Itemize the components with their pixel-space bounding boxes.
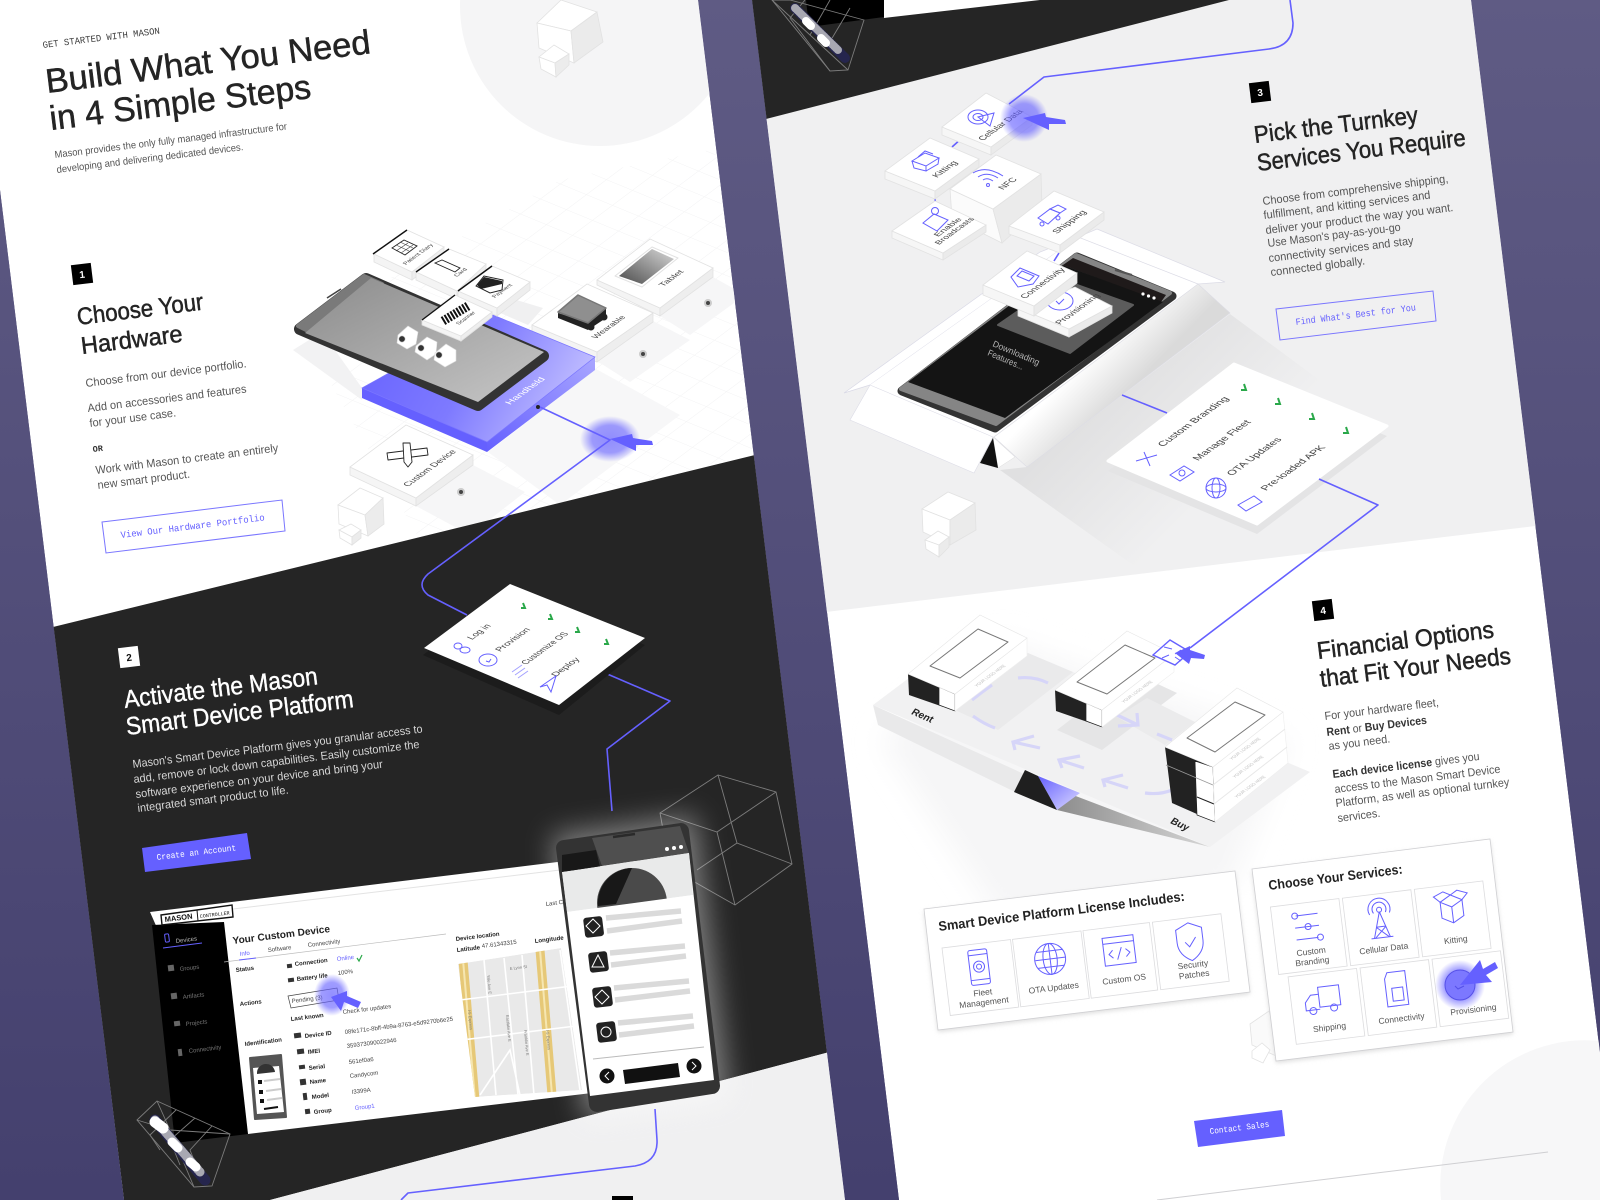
sidebar menu: Groups xyxy=(180,965,200,973)
wireframe screws xyxy=(137,1101,230,1187)
step 2 badge xyxy=(118,646,140,668)
step 4 text: Each device license gives you xyxy=(1332,751,1480,781)
phone in box xyxy=(901,255,1172,428)
step 4 text: services. xyxy=(1337,808,1381,825)
sidebar menu xyxy=(163,934,222,1056)
cell: cellular data: Cellular Data xyxy=(1359,940,1409,956)
step 3 badge peek xyxy=(612,1196,633,1200)
tile: shipping xyxy=(1009,191,1104,253)
fulcrum xyxy=(1014,770,1080,810)
step 2 text: integrated smart product to life. xyxy=(137,785,289,815)
cell: custom OS: Custom OS xyxy=(1102,971,1147,987)
dashboard content: Online xyxy=(337,955,355,963)
step 2 text xyxy=(132,723,423,815)
checklist card: log in: Customize OS xyxy=(519,631,571,666)
card: license includes: Smart Device Platform License Includes: xyxy=(938,889,1186,934)
tile: NFC xyxy=(950,155,1042,243)
dashboard content: Serial xyxy=(309,1064,326,1072)
sidebar menu: Devices xyxy=(176,936,197,945)
logo xyxy=(161,905,233,925)
box: rent 1: YOUR LOGO HERE xyxy=(973,664,1008,688)
dashboard content: I3399A xyxy=(352,1088,371,1096)
step 1 heading xyxy=(78,296,203,354)
section: light footer xyxy=(270,1044,860,1200)
tile: patient diary: Patient Diary xyxy=(402,243,435,266)
checklist card: services xyxy=(1108,364,1387,534)
step 2 text: add, remove or lock down capabilities. Easily customize the xyxy=(133,739,420,786)
decorative circle top xyxy=(460,0,710,146)
connector line: step 1 to 2 xyxy=(422,407,670,811)
tile: tablet xyxy=(597,239,713,316)
tile: kitting: Kitting xyxy=(930,160,960,179)
decorative textured area xyxy=(880,640,1290,920)
dashboard content: Actions xyxy=(240,999,263,1008)
phone in box: Features... xyxy=(986,348,1025,372)
step 3 text xyxy=(1262,173,1454,279)
dashboard content: Connection xyxy=(295,958,328,968)
section: step 3 background xyxy=(752,0,1550,620)
step 2 text: software experience on your device and bring your xyxy=(135,759,384,801)
cell: custom branding: Branding xyxy=(1295,954,1330,968)
platform: handheld: Handheld xyxy=(503,376,547,406)
phone in box: Downloading xyxy=(991,339,1041,367)
tile: provisioning xyxy=(1018,287,1112,337)
cell: OTA updates xyxy=(1012,931,1089,1007)
step 2 heading: Activate the Mason xyxy=(122,662,319,714)
list rows xyxy=(583,911,694,1043)
tile: custom device: Custom Device xyxy=(401,448,458,488)
icon: cube behind services card xyxy=(1250,1011,1285,1063)
tile: connectivity xyxy=(983,251,1077,316)
cell: kitting xyxy=(1414,881,1491,957)
cell: connectivity: Connectivity xyxy=(1378,1010,1426,1026)
tile: payment xyxy=(458,266,530,316)
step 4 text xyxy=(1324,697,1510,825)
connector line: box to checklist xyxy=(1122,395,1167,413)
logo: CONTROLLER xyxy=(200,910,230,920)
tile: custom device xyxy=(350,425,473,506)
step 2 heading: Smart Device Platform xyxy=(124,685,355,741)
step 3 text: fulfillment, and kitting services and xyxy=(1263,190,1431,222)
tile: payment: Payment xyxy=(491,283,515,299)
step 4 text: as you need. xyxy=(1328,734,1391,753)
map: E Lynn St xyxy=(510,964,528,971)
step 3 text: connected globally. xyxy=(1270,255,1366,279)
step 3 heading: Services You Require xyxy=(1255,125,1467,177)
sidebar menu: Connectivity xyxy=(189,1045,222,1055)
tile: kitting xyxy=(885,138,979,199)
dashboard content: 100% xyxy=(338,969,354,977)
phone nav xyxy=(600,1058,702,1084)
panel: right page xyxy=(752,0,1600,1200)
step 1 heading: Hardware xyxy=(79,321,184,360)
dashboard content: 08fe171c-8bff-4b9a-8763-e5d9270b6e25 xyxy=(345,1017,454,1036)
panel: left page xyxy=(0,0,860,1200)
front wall xyxy=(850,385,993,473)
sidebar menu: Projects xyxy=(186,1019,208,1028)
step 1 badge: 1 xyxy=(79,270,86,281)
box floor shadow xyxy=(1000,314,1360,570)
dashboard content: Connectivity xyxy=(308,939,341,949)
step 4 text: Rent or Buy Devices xyxy=(1326,715,1428,739)
step 3 badge xyxy=(1249,81,1271,103)
button: find what's best: Find What's Best for You xyxy=(1295,302,1416,328)
tile: cellular data xyxy=(942,93,1032,155)
box stack: buy: YOUR LOGO HERE xyxy=(1233,775,1268,799)
wireframe cube xyxy=(660,775,792,905)
button: contact sales: Contact Sales xyxy=(1209,1120,1270,1137)
card: choose your services xyxy=(1252,839,1513,1063)
dashboard content: Check for updates xyxy=(343,1004,392,1016)
eyebrow: GET STARTED WITH MASON xyxy=(42,26,160,51)
step 1 text xyxy=(85,358,279,492)
cursor: provisioning xyxy=(1435,960,1498,1010)
map: Yale Ave E xyxy=(486,975,493,995)
step 2 badge: 2 xyxy=(126,653,133,664)
box: rent 2 xyxy=(1055,631,1174,727)
checks xyxy=(521,603,608,644)
button: contact sales xyxy=(1194,1110,1285,1147)
stem lines xyxy=(935,138,1059,261)
checklist card: log in xyxy=(423,584,645,715)
right flap xyxy=(1078,229,1225,284)
status icons xyxy=(665,845,683,851)
cell: connectivity xyxy=(1360,960,1437,1036)
dark section continuation xyxy=(752,0,1229,122)
dashboard content: Identification xyxy=(245,1037,283,1048)
cell: fleet management: Fleet xyxy=(973,986,993,998)
plane shadow xyxy=(873,705,1070,795)
box stack: buy xyxy=(1165,688,1288,822)
phone: device mockup xyxy=(562,826,714,1104)
icon: phone on platform xyxy=(298,276,544,405)
button: view hardware portfolio: View Our Hardware Portfolio xyxy=(120,512,266,541)
step 3 text: Use Mason's pay-as-you-go xyxy=(1267,222,1401,250)
cell: fleet management xyxy=(942,940,1019,1015)
box stack: buy: YOUR LOGO HERE xyxy=(1228,737,1263,761)
cell: shipping: Shipping xyxy=(1312,1020,1347,1034)
fold tabs xyxy=(993,437,1015,468)
cell: cellular data xyxy=(1342,890,1419,966)
dashboard content: Software xyxy=(268,945,292,954)
step 1 text: new smart product. xyxy=(97,469,191,492)
step 2 heading xyxy=(124,671,353,735)
illustration: open box with phone xyxy=(844,229,1230,473)
step 3 heading: Pick the Turnkey xyxy=(1252,102,1420,149)
tile: card: Card xyxy=(453,268,469,278)
mini phone thumbnail xyxy=(250,1055,286,1119)
dashboard content: 561ef0a6 xyxy=(349,1057,375,1066)
cursor: step 1 xyxy=(580,416,653,462)
step 1 text: for your use case. xyxy=(89,407,177,430)
cell: kitting: Kitting xyxy=(1443,933,1468,946)
wireframe screws continuation xyxy=(772,0,864,71)
tile: broadcasts xyxy=(892,201,986,260)
tile: cellular data: Cellular Data xyxy=(976,108,1025,142)
tile: tablet: Tablet xyxy=(657,268,687,288)
card icons xyxy=(1136,452,1262,511)
intro text: Mason provides the only fully managed infrastructure for xyxy=(54,121,288,161)
step 1 text: Choose from our device portfolio. xyxy=(85,358,247,390)
cursor: dashboard pending xyxy=(314,974,361,1016)
cell: fleet management: Management xyxy=(959,994,1010,1010)
tile: card xyxy=(416,249,486,299)
dashboard content: Model xyxy=(312,1093,330,1101)
label: buy: Buy xyxy=(1169,816,1191,834)
connector line: checklist to step 4 xyxy=(1190,479,1378,648)
icon: lower cubes xyxy=(338,488,384,545)
cursor: cellular data xyxy=(1000,94,1066,142)
tile: shipping: Shipping xyxy=(1050,209,1089,235)
step 4 text: Platform, as well as optional turnkey xyxy=(1335,777,1510,810)
checklist card: log in: Log in xyxy=(465,623,493,641)
card: license includes xyxy=(924,871,1250,1032)
step 4 heading: Financial Options xyxy=(1315,616,1495,665)
tile: provisioning: Provisioning xyxy=(1053,292,1102,326)
tile: NFC: NFC xyxy=(996,176,1020,191)
icon: pencil and ruler xyxy=(387,443,428,467)
cell: security patches xyxy=(1152,914,1229,990)
step 4 badge xyxy=(1312,599,1334,621)
step 1 badge xyxy=(71,263,93,285)
dashboard xyxy=(150,858,617,1143)
box: rent 1 xyxy=(908,615,1027,711)
dashboard content: Last known xyxy=(291,1013,324,1023)
tile: broadcasts: Broadcasts xyxy=(933,216,976,246)
step 3 heading xyxy=(1252,102,1467,177)
platform: handheld xyxy=(362,315,595,452)
dashboard content: Pending (3) xyxy=(292,995,323,1005)
step 4 badge: 4 xyxy=(1320,606,1327,617)
tile: wearable xyxy=(532,284,653,362)
button: view hardware portfolio xyxy=(102,500,285,553)
icon: small cubes on phone xyxy=(397,326,456,367)
dashboard content: Latitude xyxy=(457,945,481,954)
button: create an account xyxy=(142,833,251,872)
box: rent 2: YOUR LOGO HERE xyxy=(1120,680,1155,704)
map: Franklin Ave E xyxy=(523,1030,530,1056)
step 4 text: access to the Mason Smart Device xyxy=(1334,764,1501,796)
checklist card: log in: Deploy xyxy=(549,656,583,678)
dashboard content: Group xyxy=(314,1108,332,1116)
dashboard content: 47.61343315 xyxy=(482,940,518,950)
tile: broadcasts: Enable xyxy=(932,216,965,238)
dashboard content: Status xyxy=(236,966,255,974)
checks xyxy=(1241,384,1348,433)
step 4 text: For your hardware fleet, xyxy=(1324,697,1440,723)
dashboard content: Candycom xyxy=(350,1071,379,1080)
connector line: step 2 to 3 xyxy=(401,1109,657,1200)
card icons xyxy=(454,643,556,692)
cell: security patches: Patches xyxy=(1178,968,1210,981)
illustration: rent vs buy seesaw xyxy=(873,615,1310,847)
checklist card: services: Custom Branding xyxy=(1156,396,1232,448)
map xyxy=(458,948,584,1100)
tile: scanner: Scanner xyxy=(455,311,478,326)
dashboard content: Battery life xyxy=(297,973,329,983)
icon: lower-left cubes xyxy=(922,492,976,557)
button: create an account: Create an Account xyxy=(156,843,237,863)
title: Build What You Need xyxy=(43,23,373,101)
dashboard content: 359373090022946 xyxy=(347,1038,398,1050)
step 1 text: OR xyxy=(92,444,104,455)
hero image xyxy=(562,853,693,938)
dashboard content xyxy=(224,900,565,1116)
sidebar menu: Artifacts xyxy=(183,992,205,1001)
step 2 text: Mason's Smart Device Platform gives you granular access to xyxy=(132,723,423,771)
right wall xyxy=(994,284,1230,467)
box stack: buy: YOUR LOGO HERE xyxy=(1231,755,1266,779)
dark section: step 2 xyxy=(53,444,860,1200)
dashboard content: Device location xyxy=(456,932,500,943)
map: Eastlake Ave E xyxy=(505,1015,512,1042)
dashboard content: Your Custom Device xyxy=(232,924,331,947)
cell: OTA updates: OTA Updates xyxy=(1028,980,1079,996)
checklist card: services: OTA Updates xyxy=(1225,436,1285,477)
step 4 heading: that Fit Your Needs xyxy=(1318,643,1512,693)
dashboard content: Info xyxy=(240,951,251,958)
tile: patient diary xyxy=(373,230,444,280)
cell: custom OS xyxy=(1083,923,1158,998)
tile: wearable: Wearable xyxy=(590,314,628,340)
cell: custom branding: Custom xyxy=(1296,945,1326,958)
cell: shipping xyxy=(1288,968,1365,1044)
step 4 heading xyxy=(1315,616,1512,693)
cell: custom branding xyxy=(1270,899,1347,974)
dashboard content: Device ID xyxy=(305,1031,333,1040)
step 1 text: Add on accessories and features xyxy=(87,384,247,415)
tile stack: services xyxy=(885,93,1112,337)
cell: provisioning xyxy=(1432,951,1509,1027)
button: find what's best xyxy=(1276,291,1436,340)
dashboard content: Longitude xyxy=(535,935,565,945)
logo: MASON xyxy=(164,912,193,924)
step 1 text: Work with Mason to create an entirely xyxy=(95,443,279,477)
cell: provisioning: Provisioning xyxy=(1450,1002,1497,1017)
dashboard content: Name xyxy=(310,1078,327,1086)
icon: arrows tile with cursor xyxy=(1153,640,1205,665)
flow arrows xyxy=(972,678,1172,794)
step 3 text: connectivity services and stay xyxy=(1268,235,1415,265)
label: rent: Rent xyxy=(910,707,935,726)
box inside xyxy=(870,237,1198,437)
title xyxy=(46,28,370,130)
card: choose your services: Choose Your Services: xyxy=(1268,862,1403,893)
map: I-5 Express xyxy=(467,1010,474,1030)
tile: scanner xyxy=(422,295,492,341)
tile: connectivity: Connectivity xyxy=(1018,266,1068,300)
dashboard content: Group1 xyxy=(355,1104,376,1112)
dashboard content: IMEI xyxy=(308,1048,321,1056)
step 1 heading: Choose Your xyxy=(75,289,205,331)
left flap xyxy=(844,237,1078,393)
checklist card: services: Manage Fleet xyxy=(1191,419,1254,462)
checklist card: services: Pre-loaded APK xyxy=(1259,444,1329,492)
intro text: developing and delivering dedicated devices. xyxy=(56,142,244,176)
dashboard content: Last C xyxy=(546,900,564,908)
step 3 badge: 3 xyxy=(1257,88,1264,99)
connector line: into step 3 xyxy=(1009,0,1293,104)
map: I-5 Express xyxy=(545,1030,552,1050)
icon: top cubes xyxy=(537,0,603,77)
cell: security patches: Security xyxy=(1177,958,1209,971)
illustration: hardware portfolio xyxy=(293,230,745,535)
glow behind phone xyxy=(552,815,730,1120)
decorative circle bottom xyxy=(1440,1040,1600,1200)
seesaw plane xyxy=(873,630,1310,847)
title: in 4 Simple Steps xyxy=(47,68,313,138)
intro text xyxy=(54,121,288,176)
step 3 text: Choose from comprehensive shipping, xyxy=(1262,173,1449,208)
step 3 text: deliver your product the way you want. xyxy=(1265,202,1454,237)
checklist card: log in: Provision xyxy=(493,626,533,653)
